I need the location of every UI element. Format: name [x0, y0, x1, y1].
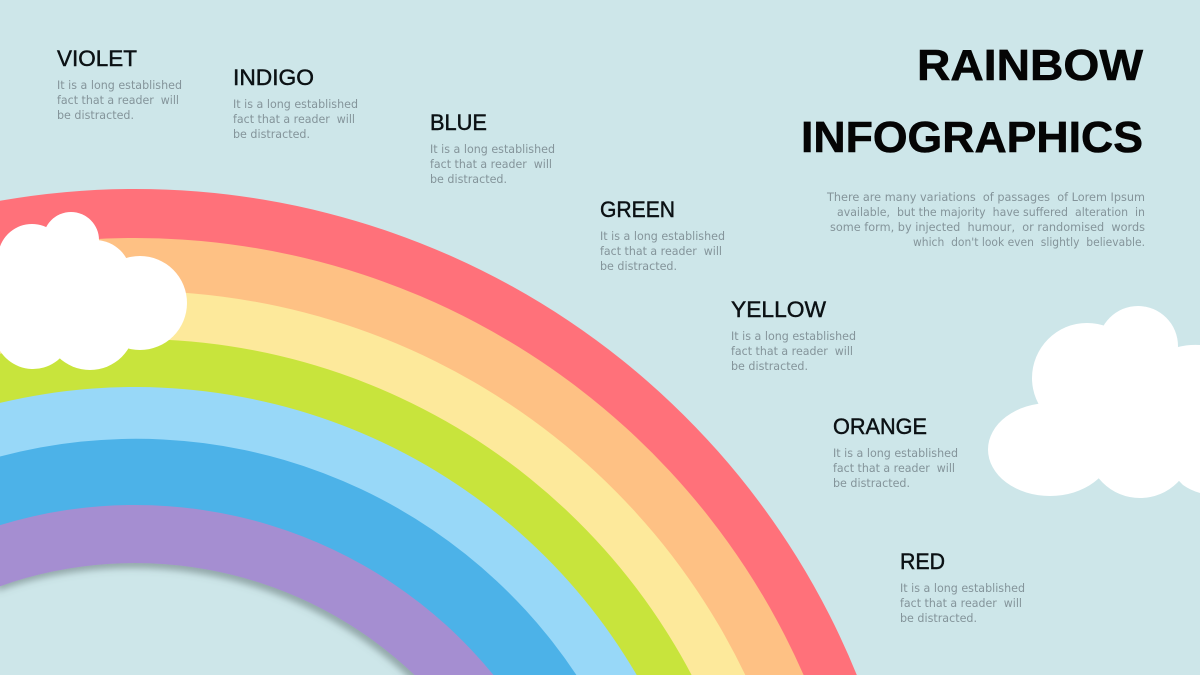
title — [801, 41, 1143, 162]
label: yellow: fact that a reader will — [731, 344, 853, 358]
description: which don't look even slightly believable. — [913, 235, 1145, 249]
label: blue: BLUE — [430, 110, 487, 135]
label: yellow: It is a long established — [731, 329, 856, 343]
label: indigo: fact that a reader will — [233, 112, 355, 126]
label: red: It is a long established — [900, 581, 1025, 595]
title: INFOGRAPHICS — [801, 113, 1143, 162]
label: indigo: be distracted. — [233, 127, 310, 141]
description — [826, 190, 1145, 249]
band: green — [0, 339, 692, 675]
label: violet: be distracted. — [57, 108, 134, 122]
label: orange: be distracted. — [833, 476, 910, 490]
description: There are many variations of passages of Lorem Ipsum — [826, 190, 1145, 204]
label: indigo: It is a long established — [233, 97, 358, 111]
band: violet — [0, 439, 575, 675]
label: violet: VIOLET — [57, 46, 137, 71]
label: green — [600, 197, 725, 273]
rainbow arc — [0, 189, 857, 675]
label: yellow: YELLOW — [731, 297, 826, 322]
label: red: fact that a reader will — [900, 596, 1022, 610]
label: yellow — [731, 297, 856, 373]
label: blue: fact that a reader will — [430, 157, 552, 171]
label: violet: fact that a reader will — [57, 93, 179, 107]
label: orange: ORANGE — [833, 414, 927, 439]
label: blue: It is a long established — [430, 142, 555, 156]
label: indigo — [233, 65, 358, 141]
cloud: left — [0, 212, 187, 370]
label: violet: It is a long established — [57, 78, 182, 92]
band: yellow — [0, 291, 745, 675]
label: green: It is a long established — [600, 229, 725, 243]
band: orange — [0, 238, 804, 675]
description: available, but the majority have suffered alteration in — [837, 205, 1145, 219]
label: red: RED — [900, 549, 945, 574]
label: blue — [430, 110, 555, 186]
description: some form, by injected humour, or randomised words — [830, 220, 1145, 234]
label: orange — [833, 414, 958, 490]
band: red — [0, 189, 857, 675]
label: orange: It is a long established — [833, 446, 958, 460]
label: indigo: INDIGO — [233, 65, 314, 90]
band: blue — [0, 439, 576, 675]
label: blue: be distracted. — [430, 172, 507, 186]
band: light blue — [0, 387, 637, 675]
label: green: be distracted. — [600, 259, 677, 273]
label: red: be distracted. — [900, 611, 977, 625]
title: RAINBOW — [917, 41, 1143, 90]
cloud: right — [988, 306, 1200, 498]
label: violet — [57, 46, 182, 122]
label: green: fact that a reader will — [600, 244, 722, 258]
label: yellow: be distracted. — [731, 359, 808, 373]
label: red — [900, 549, 1025, 625]
label: orange: fact that a reader will — [833, 461, 955, 475]
label: green: GREEN — [600, 197, 675, 222]
